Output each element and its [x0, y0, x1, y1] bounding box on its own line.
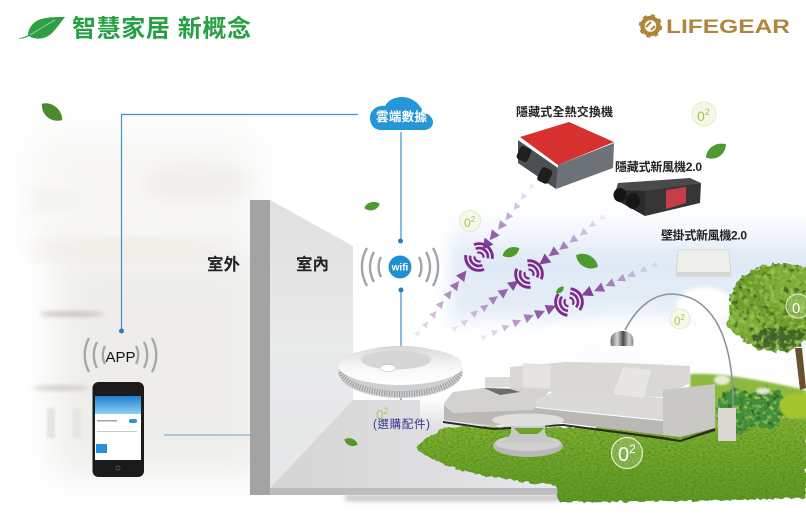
bubble left: 2	[471, 215, 476, 224]
hub button	[380, 364, 396, 372]
trunk	[795, 348, 806, 390]
canopy	[728, 264, 806, 352]
left armrest	[485, 377, 510, 388]
tree	[728, 264, 806, 390]
bubble left	[460, 210, 480, 232]
shadow	[443, 421, 715, 442]
signal stream 1	[414, 183, 535, 337]
logo wordmark: LIFEGEAR	[666, 16, 790, 38]
node dots	[119, 238, 404, 334]
outer wall edge	[250, 200, 270, 495]
wall section	[207, 200, 560, 501]
APP label: APP	[105, 349, 136, 366]
O2 mark: 0	[376, 407, 383, 422]
hub device	[338, 346, 463, 398]
O2 mark: 2	[383, 406, 388, 416]
black unit	[614, 178, 701, 216]
floor front edge	[270, 488, 560, 495]
O2 accessory note	[373, 406, 430, 431]
heading text: 智慧家居 新概念	[72, 14, 251, 42]
bubble lamp: 0	[674, 316, 680, 328]
bubble lamp: 2	[680, 313, 685, 322]
wifi label: wifi	[391, 262, 409, 274]
icon: title leaf	[18, 17, 65, 39]
chaise top	[444, 388, 552, 413]
garden plants	[714, 375, 806, 436]
product: wall-mounted fresh air unit	[661, 228, 747, 276]
bubble lawn: 0	[618, 444, 629, 466]
bubble lawn: 2	[629, 442, 636, 456]
coffee table	[492, 414, 564, 457]
optional accessory text: (選購配件)	[373, 417, 430, 431]
APP signal	[85, 338, 156, 372]
product label: 壁掛式新風機2.0	[661, 228, 747, 242]
bubble top: 0	[697, 108, 705, 124]
lamp arc	[625, 294, 733, 408]
bubble left: 0	[464, 216, 471, 230]
seat cushions	[536, 392, 663, 420]
book	[484, 388, 520, 395]
signal arcs	[85, 338, 156, 372]
floating leaves	[40, 103, 727, 448]
product label: 隱藏式新風機2.0	[615, 159, 702, 174]
phone screen	[95, 396, 141, 460]
lamp head	[610, 331, 634, 346]
wifi badge	[388, 256, 412, 278]
phone	[92, 382, 144, 477]
connection lines	[122, 114, 401, 435]
floor shadow	[345, 495, 560, 501]
signal stream 3	[480, 261, 658, 341]
red unit	[516, 122, 614, 189]
bubble lawn	[612, 438, 642, 468]
cloud shape	[370, 97, 433, 130]
pillow right	[613, 367, 651, 398]
bubble top	[692, 102, 716, 126]
bubble tree: 0	[792, 300, 800, 317]
seat base	[536, 408, 663, 435]
wifi signal	[362, 248, 438, 286]
product label: 隱藏式全熱交換機	[516, 104, 613, 119]
pillow left	[523, 363, 551, 389]
bubble lamp	[670, 309, 690, 329]
title	[18, 14, 251, 42]
lamp base	[718, 408, 736, 441]
home button	[116, 466, 120, 470]
label: indoor: 室內	[296, 254, 329, 274]
floor fade	[420, 398, 560, 430]
icon: gear	[640, 16, 661, 36]
product: concealed fresh air unit	[614, 159, 702, 216]
sofa	[443, 362, 715, 457]
chaise side	[444, 404, 536, 426]
cloud label: 雲端數據	[376, 109, 427, 124]
logo: LIFEGEAR	[640, 16, 790, 38]
background: blue sky	[420, 195, 806, 371]
O2 bubbles	[460, 102, 806, 468]
app tab	[96, 444, 107, 453]
signal arcs	[362, 248, 438, 286]
inner wall	[270, 200, 353, 488]
signal stream 2	[451, 214, 606, 332]
cloud data	[370, 97, 433, 130]
hub dent	[361, 350, 431, 370]
arm	[663, 384, 715, 437]
bubble top: 2	[705, 107, 710, 117]
label: outdoor: 室外	[207, 254, 240, 274]
app header	[95, 396, 141, 414]
grass hills and lawn	[416, 374, 806, 502]
lamp	[610, 294, 736, 441]
white unit	[676, 250, 731, 276]
app row	[97, 419, 137, 432]
phone body	[92, 382, 144, 477]
bubble tree	[786, 294, 806, 318]
hub body	[338, 346, 462, 398]
floor	[270, 400, 560, 488]
product: concealed total heat exchanger	[516, 104, 614, 189]
backrest	[510, 362, 690, 397]
